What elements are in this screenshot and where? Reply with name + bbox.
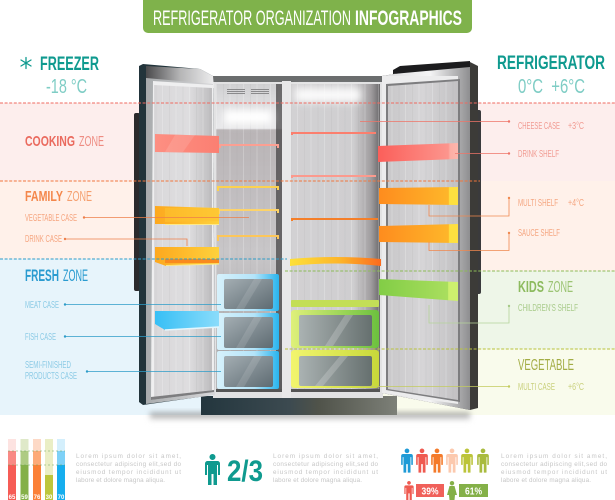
fridge arch shelf xyxy=(290,257,381,266)
right door xyxy=(382,61,481,410)
label: sauce shelf: SAUCE SHELF xyxy=(518,228,560,239)
zone: fresh xyxy=(25,266,221,382)
label: cheese case: +3°C xyxy=(568,121,584,132)
text block: lorem 1: Lorem ipsum dolor sit amet, xyxy=(76,453,181,460)
zone: fresh: FRESH xyxy=(25,266,59,285)
left door shelf: yellow top xyxy=(155,206,219,224)
text block: lorem 2: eiusmod tempor incididunt ut xyxy=(273,469,378,476)
label: drink shelf: DRINK SHELF xyxy=(518,149,559,160)
heading: freezer: FREEZER xyxy=(40,54,99,75)
label: vegetable case: VEGETABLE CASE xyxy=(25,213,77,224)
refrigerator xyxy=(134,61,481,415)
vents xyxy=(227,89,269,94)
zone: kids: ZONE xyxy=(548,279,573,296)
freezer blue cases xyxy=(217,274,279,389)
heading: freezer xyxy=(21,54,99,98)
zone: vegetable: VEGETABLE xyxy=(518,357,574,374)
dashed zone dividers xyxy=(0,103,615,349)
text block: lorem 1: eiusmod tempor incididunt ut xyxy=(76,469,181,476)
text block: lorem 2: Lorem ipsum dolor sit amet, xyxy=(273,453,378,460)
right door shelf: orange top xyxy=(379,187,458,205)
left door shelf: yellow lower xyxy=(155,247,219,266)
label: semi-finished products case xyxy=(25,360,221,382)
text block: lorem 2 xyxy=(273,453,378,484)
text block: lorem 1: labore et dolore magna aliqua. xyxy=(76,477,165,484)
label: semi-finished products case: SEMI-FINISHED xyxy=(25,360,71,371)
label: multi case: MULTI CASE xyxy=(518,382,555,393)
zone: vegetable xyxy=(360,357,584,393)
text block: lorem 3: Lorem ipsum dolor sit amet, xyxy=(501,453,607,460)
stat: 2/3: 2/3 xyxy=(227,455,263,488)
zone: cooking left label: COOKING xyxy=(25,133,75,150)
label: drink shelf xyxy=(455,149,559,160)
heading: refrigerator: 0°C +6°C xyxy=(518,76,585,98)
text block: lorem 2: labore et dolore magna aliqua. xyxy=(273,477,362,484)
bar chart xyxy=(8,439,65,500)
zone: cooking left label: ZONE xyxy=(79,133,104,150)
right door shelf: orange lower xyxy=(379,224,458,243)
icon: person teal xyxy=(205,454,220,485)
text block: lorem 1 xyxy=(76,453,181,484)
right door shelf: red xyxy=(378,143,458,162)
fridge interior xyxy=(291,84,380,392)
zone: family: FAMILY xyxy=(25,188,63,205)
zone: kids: KIDS xyxy=(518,279,544,296)
label: cheese case xyxy=(360,120,584,132)
freezer wire shelves xyxy=(218,145,278,241)
label: sauce shelf xyxy=(429,228,560,250)
label: cheese case: CHEESE CASE xyxy=(518,121,560,132)
text block: lorem 3 xyxy=(501,453,607,484)
left door xyxy=(134,64,215,405)
stat: 39% male: 39% xyxy=(422,486,439,498)
title banner: REFRIGERATOR ORGANIZATION xyxy=(153,7,351,30)
zone: fresh: ZONE xyxy=(63,266,88,285)
stat: 61% female: 61% xyxy=(465,486,482,498)
label: multi case: +6°C xyxy=(568,382,584,393)
heading: freezer: -18 °C xyxy=(46,76,87,98)
label: multi shelf: MULTI SHELF xyxy=(518,198,558,209)
label: fish case: FISH CASE xyxy=(25,332,56,343)
label: multi shelf: +4°C xyxy=(568,198,584,209)
cabinet body xyxy=(213,76,383,398)
title banner: INFOGRAPHICS xyxy=(355,7,462,30)
label: meat case: MEAT CASE xyxy=(25,300,59,311)
base xyxy=(201,396,397,415)
text block: lorem 2: consectetur adipiscing elit,sed do xyxy=(273,461,378,468)
label: multi case xyxy=(360,382,584,393)
title banner xyxy=(143,0,472,33)
zone: family xyxy=(25,188,249,246)
fridge crisper cases xyxy=(291,300,379,388)
label: children's shelf: CHILDREN'S SHELF xyxy=(518,303,578,314)
shadow under refrigerator xyxy=(150,413,470,423)
label: drink case xyxy=(25,234,187,246)
stat: 39% male xyxy=(404,481,444,500)
label: multi shelf xyxy=(429,197,584,216)
text block: lorem 3: eiusmod tempor incididunt ut xyxy=(501,469,607,476)
fridge shelves xyxy=(292,133,378,221)
text block: lorem 3: labore et dolore magna aliqua. xyxy=(501,477,591,484)
label: children's shelf xyxy=(429,303,578,323)
people icons xyxy=(401,448,489,473)
left door shelf: blue xyxy=(155,311,219,330)
heading: refrigerator xyxy=(497,53,605,98)
stat: 61% female xyxy=(447,481,488,500)
right door shelf: green xyxy=(379,279,458,301)
label: semi-finished products case: PRODUCTS CASE xyxy=(25,371,77,382)
left door shelf: salmon xyxy=(155,134,219,153)
text block: lorem 3: consectetur adipiscing elit,sed do xyxy=(501,461,607,468)
text block: lorem 1: consectetur adipiscing elit,sed do xyxy=(76,461,181,468)
icon: snowflake xyxy=(21,58,31,68)
zone: kids xyxy=(429,279,578,323)
panel: zone backgrounds xyxy=(0,103,615,415)
freezer interior xyxy=(216,84,282,392)
label: drink case: DRINK CASE xyxy=(25,234,62,245)
zone: family: ZONE xyxy=(67,188,92,205)
